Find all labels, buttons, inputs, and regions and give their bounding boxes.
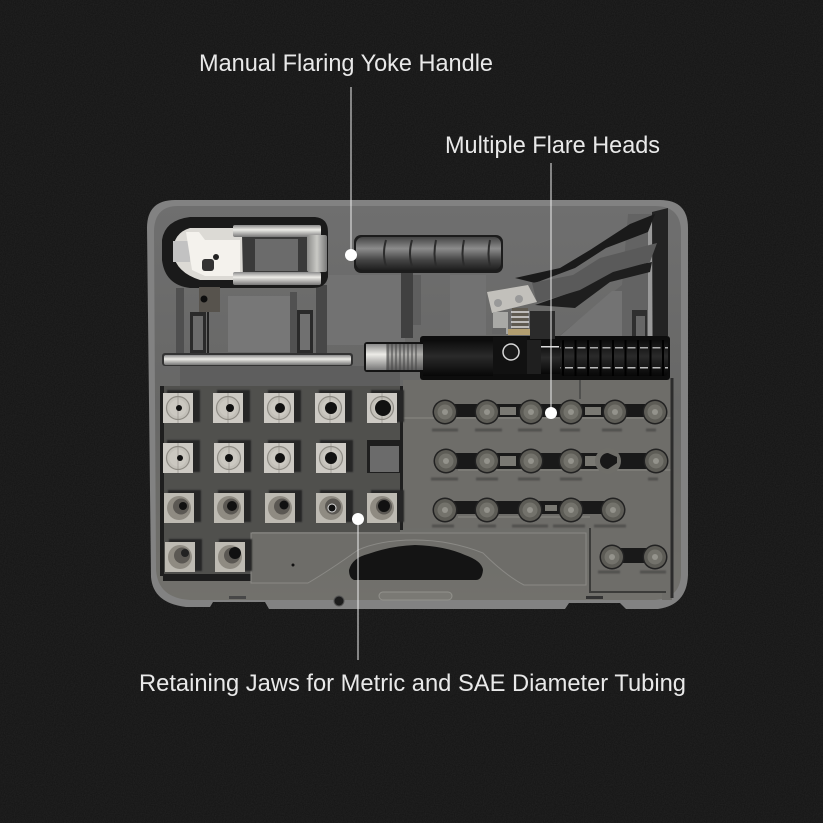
pump lever and spring (487, 214, 657, 339)
callout: Multiple Flare Heads (445, 132, 660, 419)
slot infill segments (500, 407, 601, 511)
handle panel and carry handle (229, 533, 603, 606)
flare head slot channels (450, 404, 654, 563)
callout: Manual Flaring Yoke Handle (199, 50, 493, 261)
tool case tray (147, 200, 688, 609)
callout: Manual Flaring Yoke Handle: Manual Flaring Yoke Handle (199, 50, 493, 77)
manual flaring yoke (162, 217, 328, 354)
hydraulic pump (364, 336, 670, 380)
flare head panel (403, 380, 672, 600)
retaining jaws set (163, 390, 404, 572)
callout: Multiple Flare Heads: Multiple Flare Heads (445, 132, 660, 159)
steel rod (162, 353, 353, 366)
jaws row 1 (163, 390, 404, 423)
black rubber yoke handle (354, 235, 503, 273)
callout: Retaining Jaws for Metric and SAE Diameter Tubing: Retaining Jaws for Metric and SAE Diameter Tubing (139, 670, 686, 697)
callout: Retaining Jaws for Metric and SAE Diameter Tubing (139, 513, 686, 697)
jaw bay shadow floor (160, 386, 403, 581)
flare heads set (431, 400, 668, 572)
jaws rows 3 and 4 (164, 490, 404, 572)
jaws row 2 (163, 440, 400, 473)
upper right recess (558, 212, 668, 340)
jaw bay recess (160, 386, 402, 581)
tray compartment moulding (176, 272, 486, 388)
